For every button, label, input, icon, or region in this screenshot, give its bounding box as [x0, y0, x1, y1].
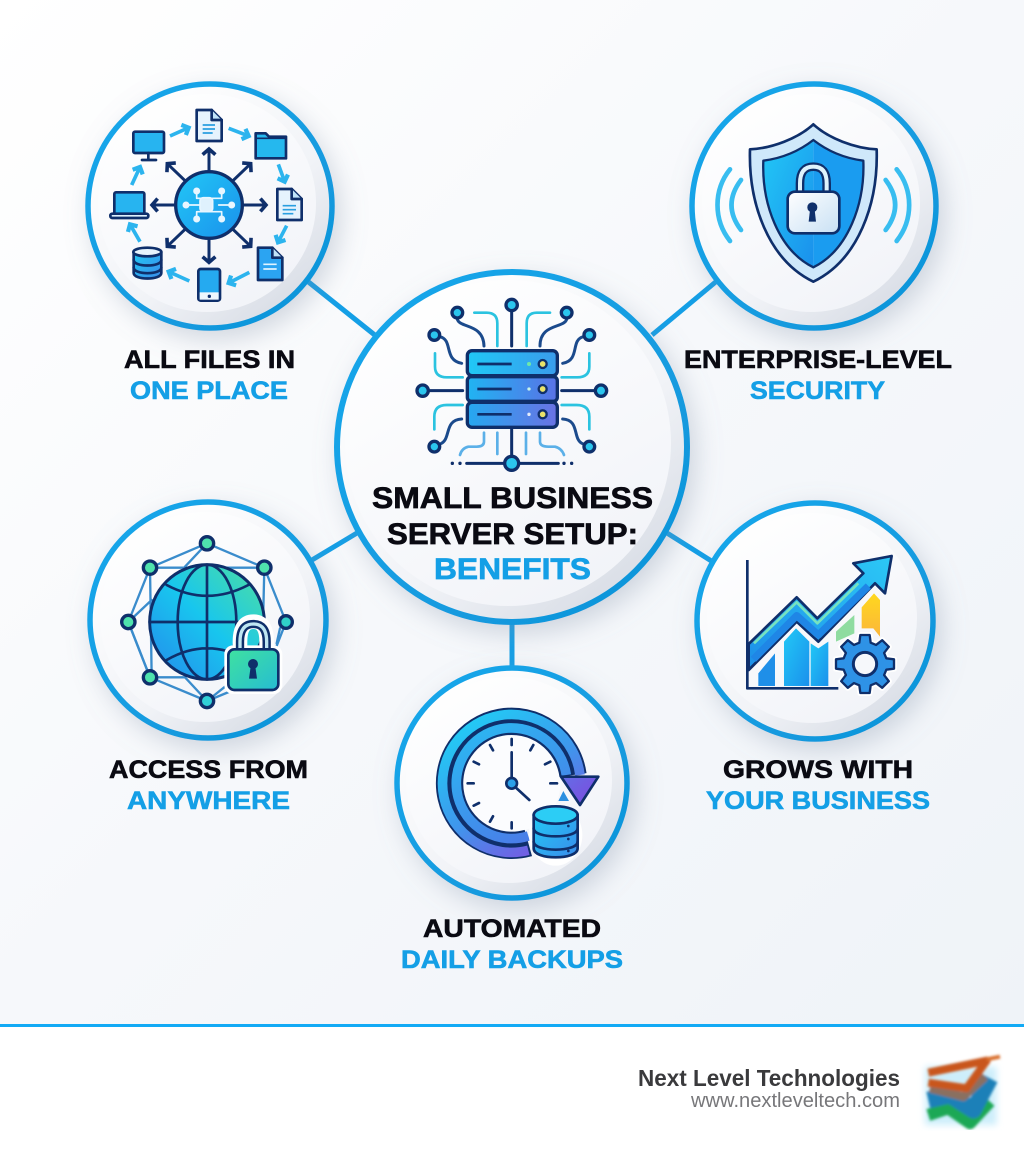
label: access from anywhere: ACCESS FROM	[109, 756, 308, 784]
label: access from anywhere: ANYWHERE	[127, 787, 290, 815]
panel: access from anywhere	[90, 502, 326, 738]
label: grows with your business: GROWS WITH	[723, 756, 913, 784]
footer company name and url: www.nextleveltech.com	[690, 1090, 900, 1112]
label: enterprise-level security: ENTERPRISE-LEVEL	[684, 346, 952, 374]
title: small business server setup benefits	[372, 482, 653, 586]
label: access from anywhere	[109, 756, 308, 815]
panel: all files in one place	[88, 84, 332, 328]
title: small business server setup benefits: SMALL BUSINESS	[372, 482, 653, 515]
label: automated daily backups	[401, 915, 623, 974]
footer band	[0, 1024, 1024, 1154]
panel: central hub	[337, 272, 687, 622]
label: grows with your business: YOUR BUSINESS	[706, 787, 930, 815]
label: enterprise-level security: SECURITY	[750, 377, 885, 405]
label: enterprise-level security	[684, 346, 952, 405]
title: small business server setup benefits: BENEFITS	[434, 553, 591, 586]
label: grows with your business	[706, 756, 930, 815]
panel: automated daily backups	[397, 668, 627, 898]
icon: shield with padlock and signal waves	[717, 124, 909, 282]
connector lines between hub and benefit circles	[306, 280, 718, 670]
label: all files in one place: ONE PLACE	[130, 377, 288, 405]
icon: globe with network nodes and padlock	[122, 537, 292, 708]
icon: central hub with devices and files	[110, 110, 302, 301]
label: automated daily backups: AUTOMATED	[423, 915, 601, 943]
label: all files in one place: ALL FILES IN	[124, 346, 295, 374]
panel: grows with your business	[697, 503, 933, 739]
panel: enterprise-level security	[692, 84, 936, 328]
logo: layered zigzag mark	[925, 1057, 1000, 1125]
footer company name and url: Next Level Technologies	[638, 1065, 900, 1091]
icon: clock with circular arrow and database	[443, 714, 598, 866]
label: all files in one place	[124, 346, 295, 405]
label: automated daily backups: DAILY BACKUPS	[401, 946, 623, 974]
icon: server rack with circuit traces	[417, 299, 607, 470]
footer company name and url	[638, 1065, 900, 1112]
icon: growth chart with arrow and gear	[747, 556, 894, 693]
title: small business server setup benefits: SERVER SETUP:	[387, 518, 638, 551]
